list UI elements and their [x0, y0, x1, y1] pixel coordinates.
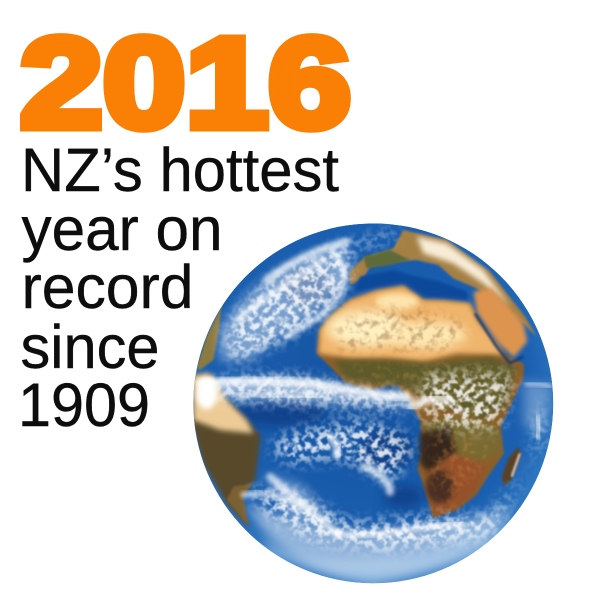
subtitle text: year on	[22, 195, 222, 263]
Red Sea and Gulf of Aden	[475, 313, 523, 363]
Africa	[317, 286, 524, 517]
cloud masses soft	[200, 243, 552, 578]
subtitle text: since	[20, 313, 160, 381]
subtitle text: record	[22, 253, 194, 321]
land mottling	[337, 307, 510, 507]
Mediterranean	[353, 270, 468, 302]
speckled clouds	[203, 230, 543, 550]
dark ocean patches	[227, 268, 423, 508]
subtitle text: 1909	[18, 371, 150, 439]
bright cloud streaks	[200, 242, 550, 535]
Madagascar	[502, 447, 522, 486]
bottom limb haze	[260, 517, 510, 587]
Europe and Asia rim	[349, 230, 537, 337]
South America	[193, 373, 261, 528]
ocean	[193, 223, 553, 583]
subtitle text	[18, 140, 339, 439]
icon: earth globe	[193, 223, 554, 584]
Arabia	[473, 288, 527, 357]
North-west rim land	[197, 305, 222, 370]
